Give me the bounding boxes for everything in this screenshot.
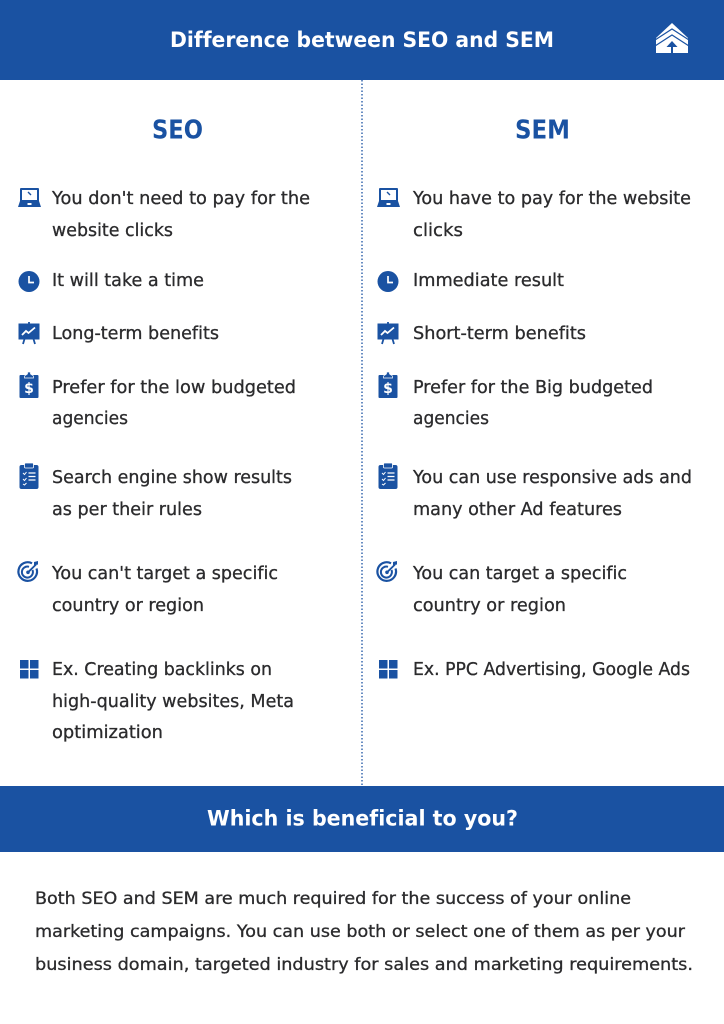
item: examples: Ex. PPC Advertising, Google Ads xyxy=(413,660,690,680)
item: examples: Ex. Creating backlinks on xyxy=(52,660,272,680)
heading: SEM: SEM xyxy=(515,116,570,146)
conclusion text: marketing campaigns. You can use both or select one of them as per your xyxy=(35,922,685,941)
heading: SEO: SEO xyxy=(152,116,203,146)
item: budget: agencies xyxy=(413,409,489,429)
item: benefits: Long-term benefits xyxy=(52,324,219,344)
conclusion text xyxy=(35,889,693,974)
item: examples xyxy=(20,660,294,743)
conclusion text: business domain, targeted industry for sales and marketing requirements. xyxy=(35,955,693,974)
header band xyxy=(0,0,724,80)
item: targeting: You can't target a specific xyxy=(51,564,278,584)
panel: SEO xyxy=(18,116,310,743)
item: clicks: You don't need to pay for the xyxy=(51,189,310,209)
item: results xyxy=(20,463,292,520)
item: ads xyxy=(378,463,692,520)
item: clicks: clicks xyxy=(413,221,463,241)
item: benefits: Short-term benefits xyxy=(413,324,586,344)
title: Difference between SEO and SEM xyxy=(170,28,554,52)
item: targeting: country or region xyxy=(413,596,566,616)
item: clicks xyxy=(18,188,310,241)
item: budget: Prefer for the Big budgeted xyxy=(413,378,653,398)
item: results: Search engine show results xyxy=(52,468,292,488)
item: examples: optimization xyxy=(52,723,163,743)
item: clicks: website clicks xyxy=(52,221,173,241)
item: results: as per their rules xyxy=(52,500,202,520)
conclusion text: Both SEO and SEM are much required for the success of your online xyxy=(35,889,631,908)
item: ads: many other Ad features xyxy=(413,500,622,520)
item: targeting: You can target a specific xyxy=(412,564,627,584)
item: time: Immediate result xyxy=(413,271,564,291)
item: ads: You can use responsive ads and xyxy=(412,468,692,488)
item: budget xyxy=(20,372,296,429)
item: budget: Prefer for the low budgeted xyxy=(52,378,296,398)
icon: house logo xyxy=(655,23,689,53)
item: targeting xyxy=(377,561,627,616)
item: targeting: country or region xyxy=(52,596,204,616)
item: examples: high-quality websites, Meta xyxy=(52,692,294,712)
item: clicks xyxy=(377,188,691,241)
item: time: It will take a time xyxy=(52,271,204,291)
footer band xyxy=(0,786,724,852)
item: clicks: You have to pay for the website xyxy=(412,189,691,209)
column divider xyxy=(361,80,363,786)
footer heading: Which is beneficial to you? xyxy=(207,806,518,830)
item: budget: agencies xyxy=(52,409,128,429)
item: targeting xyxy=(18,561,278,616)
panel: SEM xyxy=(377,116,692,680)
item: budget xyxy=(378,372,653,429)
